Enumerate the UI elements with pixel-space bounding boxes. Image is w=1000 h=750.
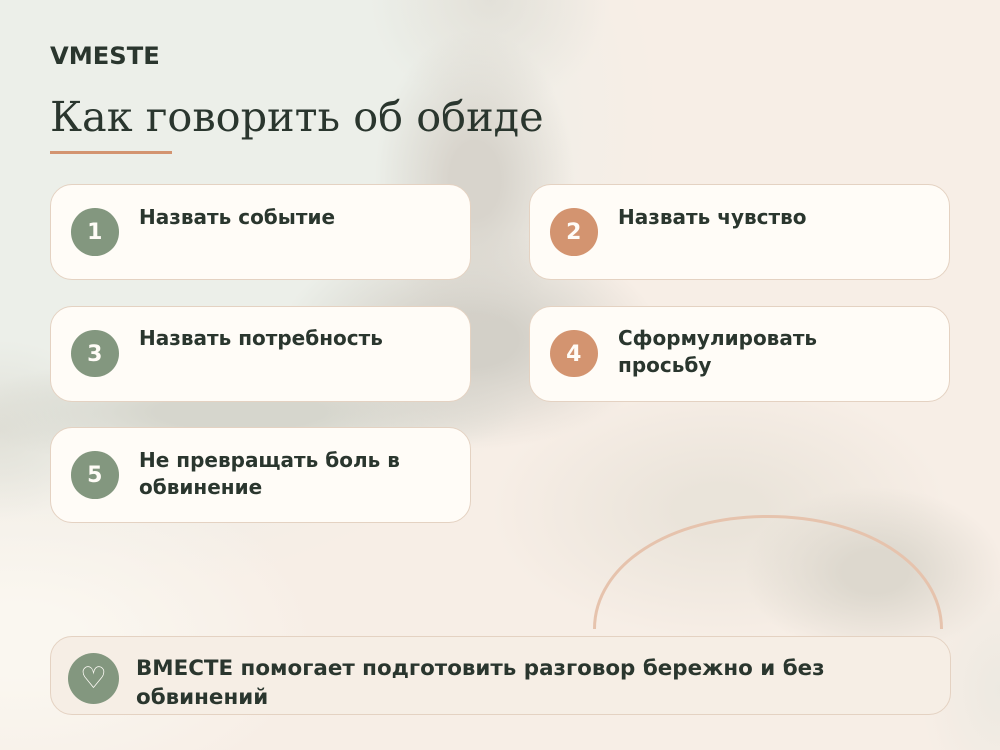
decorative arc [593,515,943,629]
card 1 [50,184,471,280]
icon: heart [68,653,119,704]
title: Как говорить об обиде [50,93,544,141]
icon: heart: ♡ [80,661,107,696]
footer callout [50,636,951,715]
brand name: VMESTE [50,42,160,70]
card 5: Не превращать боль в обвинение [139,448,400,498]
card 4 [529,306,950,402]
card 3 [50,306,471,402]
card 1: Назвать событие [139,204,335,228]
card 4: 4 [566,342,581,366]
card 5: 5 [87,463,102,488]
footer text: ВМЕСТЕ помогает подготовить разговор бережно и без обвинений [136,656,825,710]
card 2: Назвать чувство [618,204,806,228]
card 4: Сформулировать просьбу [618,326,817,377]
card 1: 1 [87,220,102,245]
card 2: 2 [566,220,581,245]
card 3: 3 [87,342,102,366]
card 3: Назвать потребность [139,326,383,350]
card 2 [529,184,950,280]
title underline [50,151,172,154]
card 5 [50,427,471,523]
